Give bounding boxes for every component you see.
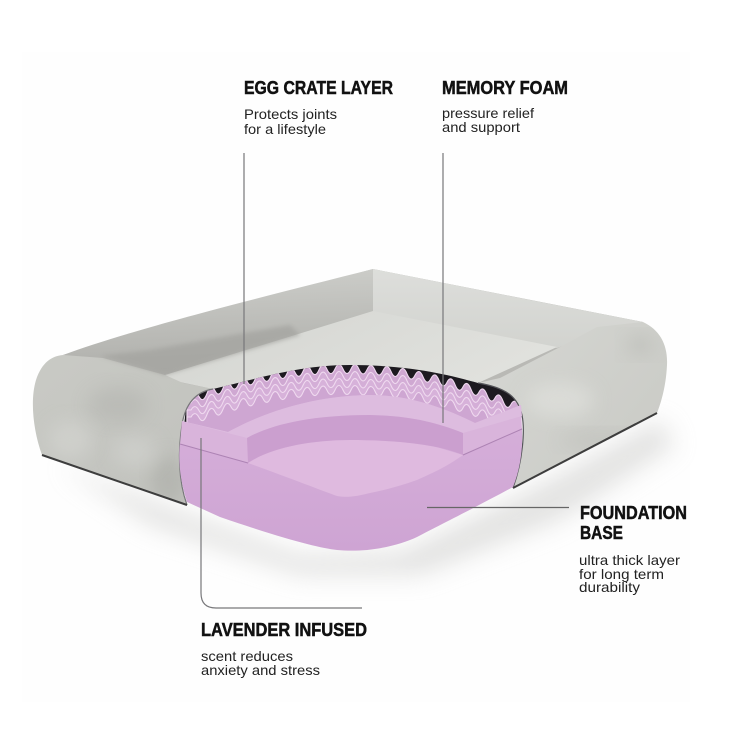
callout: memory foam: MEMORY FOAM	[442, 78, 568, 98]
callout: foundation base: for long term	[579, 566, 664, 582]
callout: egg crate layer: EGG CRATE LAYER	[244, 78, 393, 98]
bolster base trim	[42, 413, 657, 505]
seat cushion surface	[165, 311, 557, 389]
callout: foundation base: durability	[579, 579, 640, 595]
callout: lavender infused	[201, 620, 367, 678]
callout: foundation base: BASE	[580, 523, 623, 543]
callout: foundation base: ultra thick layer	[579, 552, 680, 568]
callout: memory foam: pressure relief	[442, 105, 534, 121]
back-right bolster	[373, 269, 643, 348]
callout: egg crate layer	[244, 78, 393, 137]
callout: foundation base	[579, 503, 687, 595]
callout: lavender infused: scent reduces	[201, 648, 293, 664]
leader line: foundation base	[427, 506, 569, 508]
egg crate layer	[184, 365, 518, 432]
front-right bolster	[478, 322, 667, 488]
callout: lavender infused: anxiety and stress	[201, 662, 320, 678]
front-left bolster	[33, 355, 213, 505]
drop shadow beneath bed	[60, 420, 675, 575]
bolster inner crease	[100, 325, 300, 375]
leader line: memory foam	[442, 153, 444, 423]
foundation foam layer	[179, 428, 522, 551]
leader line: egg crate layer	[243, 153, 245, 384]
bolster underlay	[63, 269, 643, 395]
callout: lavender infused: LAVENDER INFUSED	[201, 620, 367, 640]
back-left bolster	[63, 269, 373, 376]
illustration: cutaway dog bed	[33, 269, 667, 551]
callout: egg crate layer: Protects joints	[244, 106, 337, 122]
leader line: lavender infused	[201, 438, 362, 608]
callout: memory foam	[442, 78, 568, 135]
callout: memory foam: and support	[442, 119, 520, 135]
callout: foundation base: FOUNDATION	[580, 503, 687, 523]
callout: egg crate layer: for a lifestyle	[244, 121, 326, 137]
memory foam layer	[180, 395, 522, 463]
